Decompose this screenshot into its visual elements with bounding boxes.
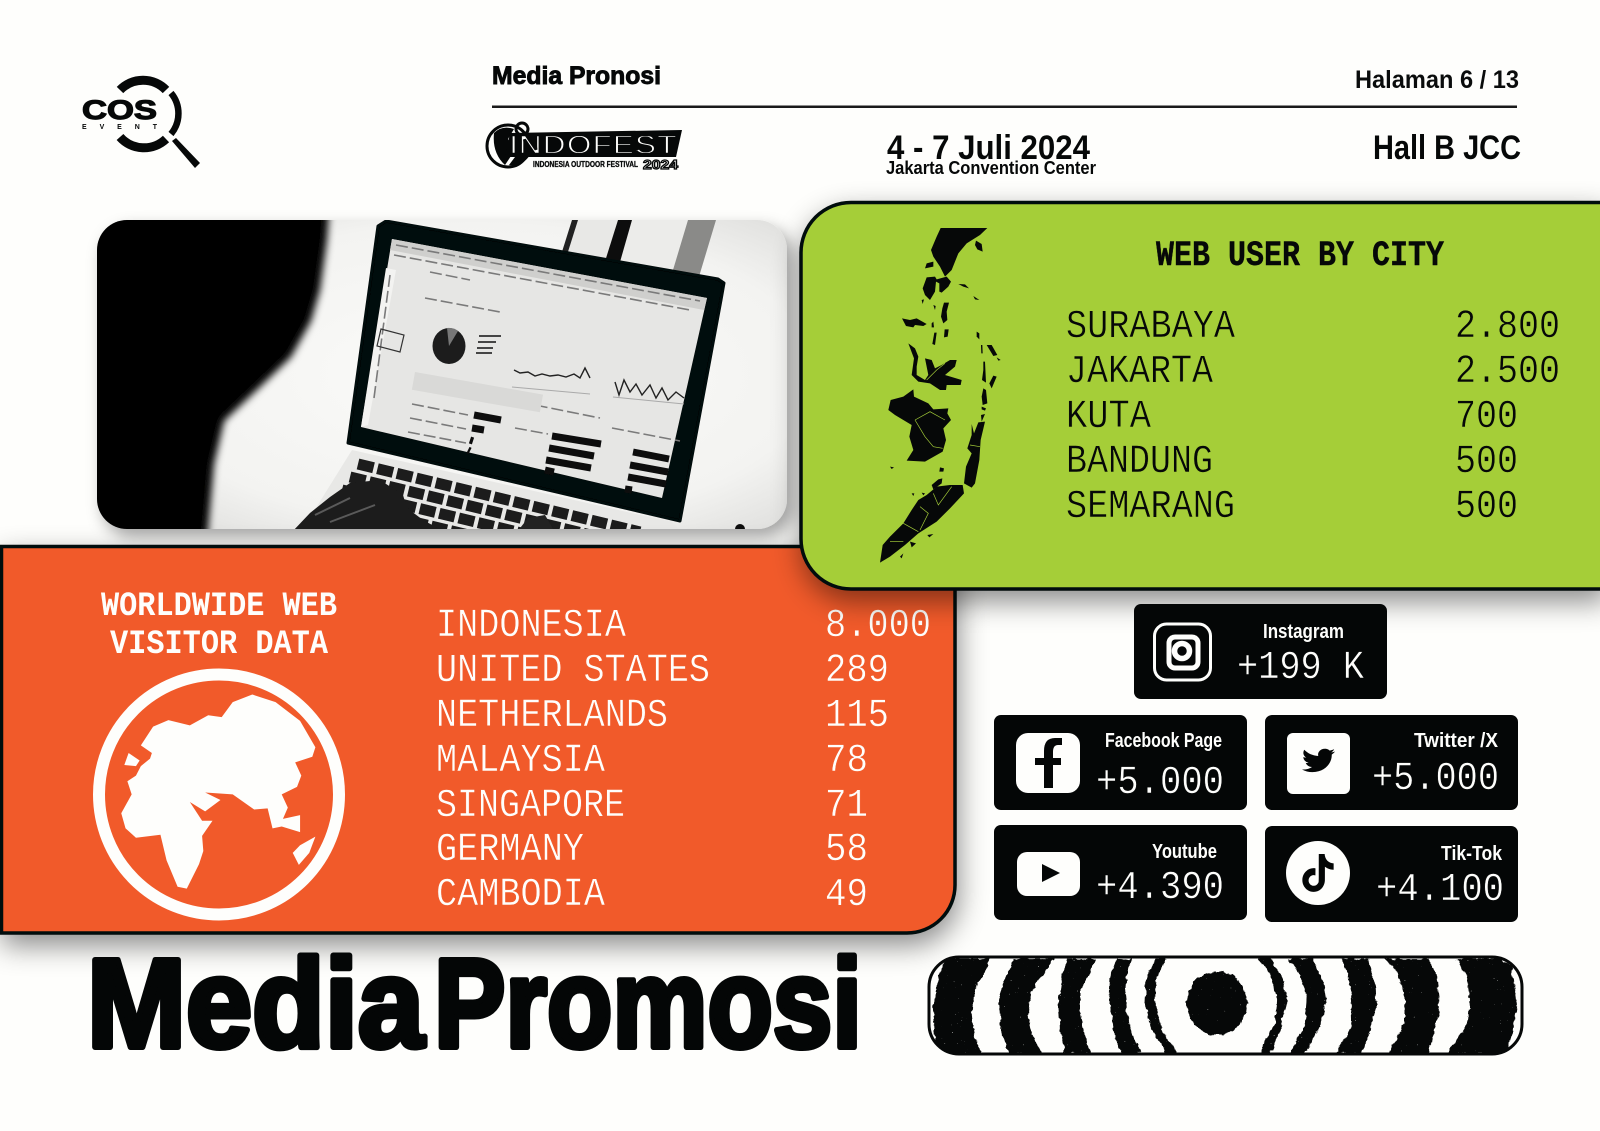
list: cities: JAKARTA <box>1066 350 1213 395</box>
card: Tik-Tok: Tik-Tok <box>1441 843 1503 865</box>
icon: TikTok <box>1286 841 1350 905</box>
logo: COS Event: EVENT <box>82 124 158 131</box>
logo: Indofest <box>487 123 682 172</box>
list: visitor numbers: 115 <box>825 694 889 739</box>
conversions line chart <box>615 380 684 400</box>
list: visitor countries: NETHERLANDS <box>436 694 668 739</box>
list: visitor numbers: 78 <box>825 739 868 784</box>
card: Instagram: +199 K <box>1237 646 1364 691</box>
icon: Youtube <box>1017 852 1080 896</box>
silhouette of person <box>97 220 335 529</box>
logo: COS Event <box>82 80 200 168</box>
list: visitor numbers <box>825 604 931 918</box>
icon: Twitter <box>1287 733 1350 794</box>
laptop base and keyboard <box>316 450 642 529</box>
logo: COS Event: COS <box>82 95 157 125</box>
list: city numbers: 500 <box>1455 440 1518 485</box>
list: visitor countries: MALAYSIA <box>436 739 605 784</box>
map: Indonesia <box>880 228 1001 563</box>
list: visitor countries: SINGAPORE <box>436 784 625 829</box>
list: visitor countries: GERMANY <box>436 828 584 873</box>
list: cities: KUTA <box>1066 395 1151 440</box>
card: Youtube: Youtube <box>1152 841 1217 863</box>
logo: Indofest: 2024 <box>643 157 679 172</box>
pie chart <box>432 328 466 364</box>
list: cities: BANDUNG <box>1066 440 1213 485</box>
heading: worldwide web: WORLDWIDE WEB <box>101 588 337 626</box>
card: Facebook Page: Facebook Page <box>1105 730 1222 752</box>
decorative band: concentric rings <box>929 957 1522 1054</box>
big title: Media <box>87 933 425 1074</box>
big title <box>87 933 862 1074</box>
header: page number: Halaman 6 / 13 <box>1355 66 1519 94</box>
card: Twitter / X <box>1265 715 1518 810</box>
list: visitor countries <box>436 604 710 918</box>
list: cities: SURABAYA <box>1066 305 1235 350</box>
list: visitor numbers: 289 <box>825 649 889 694</box>
data table bars <box>468 415 669 490</box>
icon: globe <box>99 674 339 914</box>
laptop screen bezel <box>348 221 724 521</box>
heading: visitor data: VISITOR DATA <box>110 626 329 664</box>
event hall: Hall B JCC <box>1373 129 1521 167</box>
header: section title: Media Pronosi <box>492 62 661 90</box>
list: visitor numbers: 49 <box>825 873 868 918</box>
logo: Indofest: INDOFEST <box>509 129 677 160</box>
big title: Promosi <box>434 933 862 1074</box>
list: city numbers <box>1455 305 1560 530</box>
logo: Indofest: INDONESIA OUTDOOR FESTIVAL <box>533 160 638 169</box>
list: city numbers: 2.500 <box>1455 350 1560 395</box>
card: Facebook Page: +5.000 <box>1096 761 1224 806</box>
list: city numbers: 2.800 <box>1455 305 1560 350</box>
list: cities: SEMARANG <box>1066 485 1235 530</box>
icon: Instagram <box>1154 624 1210 680</box>
card: Tik-Tok <box>1265 826 1518 922</box>
card: Youtube <box>994 825 1247 920</box>
card: Youtube: +4.390 <box>1096 866 1224 911</box>
list: visitor numbers: 58 <box>825 828 868 873</box>
sidebar selection <box>377 329 404 352</box>
list: cities <box>1066 305 1235 530</box>
event date: 4 - 7 Juli 2024 <box>887 129 1090 167</box>
card: Instagram: Instagram <box>1263 621 1344 643</box>
panel: web user by city <box>801 202 1600 589</box>
icon: Facebook <box>1016 733 1080 793</box>
typing hand <box>294 481 548 529</box>
photo: laptop with analytics dashboard <box>80 200 787 558</box>
list: visitor numbers: 71 <box>825 784 868 829</box>
list: visitor countries: CAMBODIA <box>436 873 605 918</box>
card: Twitter / X: +5.000 <box>1372 757 1499 802</box>
sessions line chart <box>514 368 590 378</box>
panel: worldwide web visitor data <box>2 546 955 933</box>
legend marks <box>476 335 501 354</box>
card: Facebook Page <box>994 715 1247 810</box>
laptop screen <box>361 239 707 498</box>
card: Instagram <box>1134 604 1387 699</box>
list: city numbers: 700 <box>1455 395 1518 440</box>
card: Twitter / X: Twitter /X <box>1414 730 1499 752</box>
list: visitor countries: INDONESIA <box>436 604 626 649</box>
background stripes behind laptop <box>562 220 716 274</box>
event venue: Jakarta Convention Center <box>886 158 1096 178</box>
list: visitor numbers: 8.000 <box>825 604 931 649</box>
heading: web user by city: WEB USER BY CITY <box>1156 236 1444 276</box>
header rule <box>492 106 1517 108</box>
list: city numbers: 500 <box>1455 485 1518 530</box>
card: Tik-Tok: +4.100 <box>1376 868 1504 913</box>
list: visitor countries: UNITED STATES <box>436 649 710 694</box>
